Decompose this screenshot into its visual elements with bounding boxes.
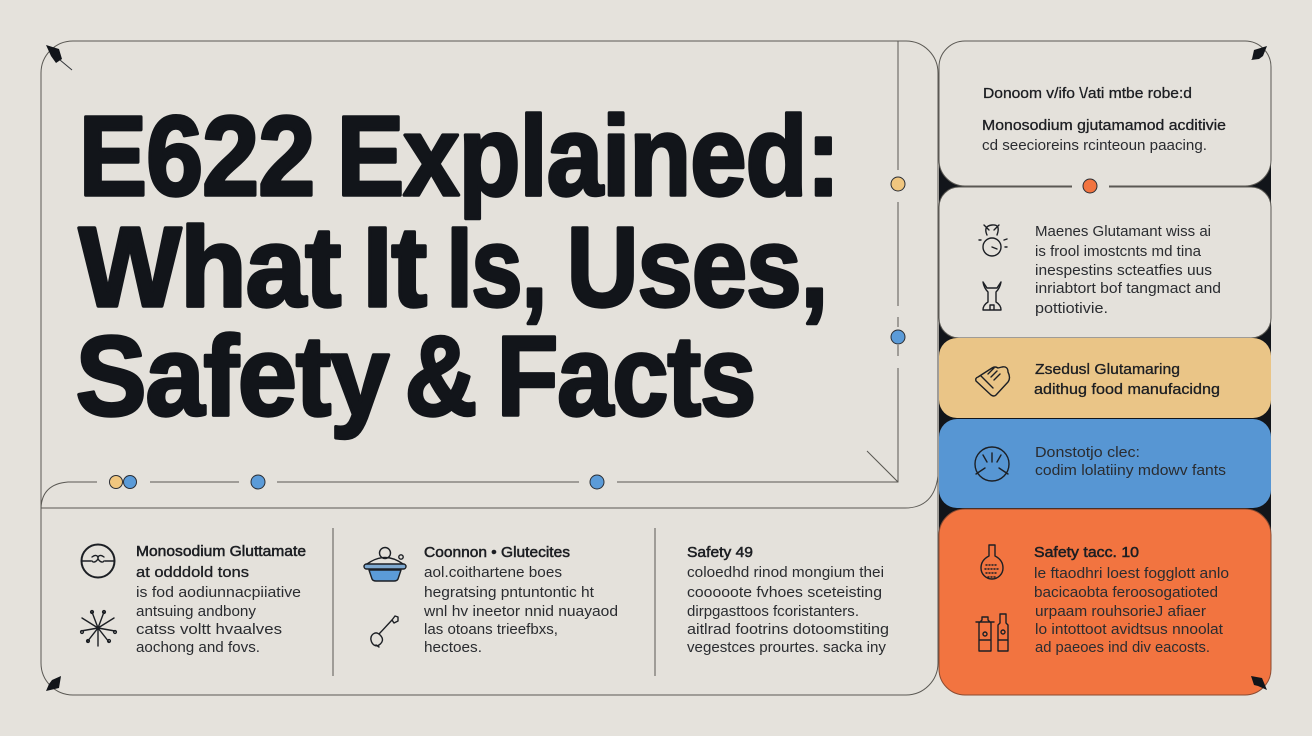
text: orange card: bacicaobta feroosogatioted <box>1034 585 1218 601</box>
corner ornament: bottom right <box>1251 676 1267 690</box>
title: Is, <box>447 204 546 330</box>
icon: whisk <box>371 616 398 647</box>
connector dots on title frame <box>110 177 905 489</box>
title: It <box>363 204 427 330</box>
corner ornament: bottom left <box>46 676 61 691</box>
text: orange card <box>1034 545 1229 656</box>
text: Common Glutecites: las otoans trieefbxs, <box>424 622 558 638</box>
text: Monosodium Glutamate: aochong and fovs. <box>136 640 260 656</box>
text: orange card: Safety tacc. 10 <box>1034 545 1139 561</box>
text: yellow card: adithug food manufacidng <box>1034 382 1220 398</box>
text: blue card: Donstotjo clec: <box>1035 445 1140 461</box>
column: Safety 49: vegestces prourtes. sacka iny <box>687 640 887 656</box>
icon: circle with molecule <box>82 544 114 578</box>
title <box>76 93 839 439</box>
text: Common Glutecites <box>423 545 618 656</box>
icon: starburst <box>81 611 116 646</box>
icon: sprout in circle <box>979 225 1007 256</box>
column: Safety 49: Safety 49 <box>687 545 753 561</box>
column: Common Glutecites <box>364 545 618 656</box>
text: glutamate card: Maenes Glutamant wiss ai <box>1035 224 1211 240</box>
text: Monosodium Glutamate: catss voltt hvaalves <box>136 622 282 638</box>
divider <box>332 528 334 676</box>
text: glutamate card: is frool imostcnts md tina <box>1035 244 1202 260</box>
corner ornament: top right <box>1251 46 1267 60</box>
column: Safety 49: aitlrad footrins dotoomstiting <box>687 622 889 638</box>
text: glutamate card: pottiotivie. <box>1035 301 1108 317</box>
text: glutamate card: inriabtort bof tangmact and <box>1035 281 1221 297</box>
text: Common Glutecites: hectoes. <box>424 640 482 656</box>
column: Safety 49: cooooote fvhoes sceteisting <box>687 585 882 601</box>
panel: intro card: Monosodium gjutamamod acditivie <box>982 118 1226 134</box>
text: yellow card <box>1034 362 1220 398</box>
corner ornament: top left <box>46 45 72 70</box>
panel: intro card <box>939 41 1271 186</box>
divider with orange dot between intro and glutamate cards <box>1072 178 1109 194</box>
text: glutamate card <box>1035 224 1221 317</box>
title: What <box>79 204 341 330</box>
text: Monosodium Glutamate: antsuing andbony <box>136 604 257 620</box>
panel: blue card <box>939 419 1271 508</box>
icon: oven mitt <box>976 367 1010 396</box>
panel: intro card: Donoom v/ifo \/ati mtbe robe:d <box>983 86 1192 102</box>
text: Common Glutecites: hegratsing pntuntontic ht <box>424 585 594 601</box>
icon: blue cooking pot <box>364 548 406 581</box>
text: Common Glutecites: aol.coithartene boes <box>424 565 562 581</box>
icon: bottles <box>976 614 1008 651</box>
icon: figure outline <box>983 282 1001 310</box>
text: orange card: le ftaodhri loest fogglott anlo <box>1034 566 1229 582</box>
title: Uses, <box>567 204 827 330</box>
text: blue card <box>1035 445 1226 479</box>
title: Explained: <box>337 93 839 219</box>
icon: circle with rays <box>975 447 1009 481</box>
panel: main title and summary frame <box>41 41 938 695</box>
panel: orange safety card <box>939 509 1271 695</box>
title: Facts <box>497 313 755 439</box>
text: yellow card: Zsedusl Glutamaring <box>1035 362 1180 378</box>
panel: yellow food manufacturing card <box>939 338 1271 418</box>
text: orange card: lo intottoot avidtsus nnoolat <box>1035 622 1223 638</box>
text: Monosodium Glutamate: is fod aodiunnacpiiative <box>136 585 301 601</box>
text: Monosodium Glutamate: Monosodium Gluttamate <box>136 544 306 560</box>
title: Safety <box>76 313 389 439</box>
text: blue card: codim lolatiiny mdowv fants <box>1035 463 1226 479</box>
column: Monosodium Glutamate <box>81 544 306 656</box>
black backing behind sidebar cards <box>939 160 1271 535</box>
divider <box>654 528 656 676</box>
text: Common Glutecites: wnl hv ineetor nnid nuayaod <box>423 604 618 620</box>
text: Monosodium Glutamate <box>136 544 306 656</box>
panel: intro card: cd seecioreins rcinteoun paacing. <box>982 138 1207 154</box>
title: & <box>405 313 476 439</box>
text: glutamate card: inespestins scteatfies uus <box>1035 263 1212 279</box>
text: Monosodium Glutamate: at odddold tons <box>136 565 249 581</box>
panel: glutamate card <box>939 187 1271 338</box>
column: Safety 49: coloedhd rinod mongium thei <box>687 565 884 581</box>
text: orange card: urpaam rouhsorieJ afiaer <box>1035 604 1206 620</box>
column: Safety 49: dirpgasttoos fcoristanters. <box>687 604 859 620</box>
icon: flask <box>981 545 1003 579</box>
column: Safety 49 <box>687 545 889 656</box>
title: E622 <box>79 93 314 219</box>
text: orange card: ad paeoes ind div eacosts. <box>1035 640 1210 656</box>
text: Common Glutecites: Coonnon • Glutecites <box>424 545 570 561</box>
